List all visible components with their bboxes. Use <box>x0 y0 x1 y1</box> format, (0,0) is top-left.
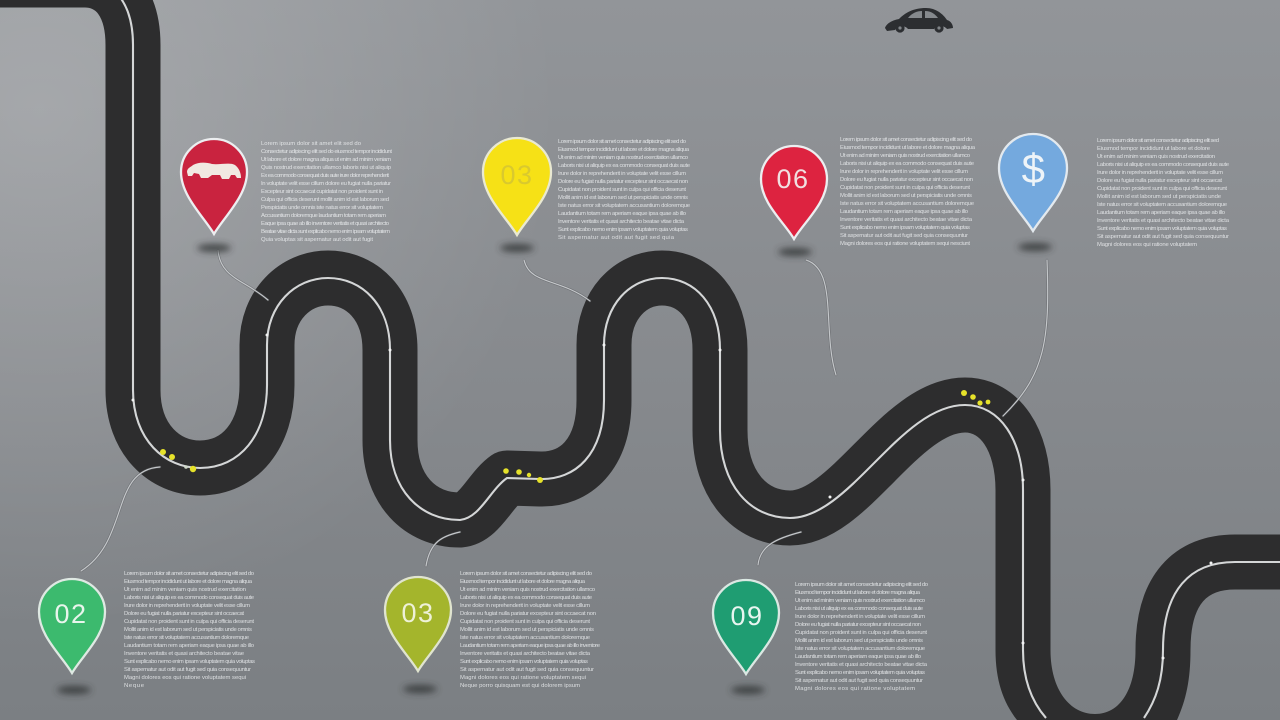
pin 7: teal 09 <box>713 580 779 674</box>
text block 4: Irure dolor in reprehenderit in voluptate velit esse cillum <box>1097 170 1223 176</box>
text block 5 <box>124 571 255 689</box>
text block 6: Iste natus error sit voluptatem accusantium doloremque <box>460 635 591 641</box>
text block 7: Eiusmod tempor incididunt ut labore et dolore magna aliqua <box>795 590 921 596</box>
text block 5: Cupidatat non proident sunt in culpa qui officia deserunt <box>124 619 254 625</box>
text block 1: Perspiciatis unde omnis iste natus error sit voluptatem <box>261 205 383 211</box>
icon: hippo silhouette <box>187 163 241 179</box>
icon: car <box>885 8 953 33</box>
pin 1: red with animal icon <box>181 139 247 234</box>
pin 4: blue dollar <box>999 134 1067 231</box>
text block 6: Neque porro quisquam est qui dolorem ipsum <box>460 683 580 689</box>
yellow road markers <box>160 390 990 483</box>
text block 3 <box>840 137 976 247</box>
text block 5: Sunt explicabo nemo enim ipsam voluptatem quia voluptas <box>124 659 255 665</box>
pin 5: green 02: 02 <box>54 599 88 629</box>
text block 6 <box>460 571 601 689</box>
text block 2: Cupidatat non proident sunt in culpa qui officia deserunt <box>558 187 686 193</box>
text block 3: Sit aspernatur aut odit aut fugit sed quia consequuntur <box>840 233 968 239</box>
text block 5: Sit aspernatur aut odit aut fugit sed quia consequuntur <box>124 667 251 673</box>
text block 5: Inventore veritatis et quasi architecto beatae vitae <box>124 651 245 657</box>
text block 1: Accusantium doloremque laudantium totam rem aperiam <box>261 213 386 219</box>
text block 6: Eiusmod tempor incididunt ut labore et dolore magna aliqua <box>460 579 586 585</box>
text block 5: Irure dolor in reprehenderit in voluptate velit esse cillum <box>124 603 250 609</box>
text block 5: Ut enim ad minim veniam quis nostrud exercitation <box>124 587 246 593</box>
text block 7: Cupidatat non proident sunt in culpa qui officia deserunt <box>795 630 927 636</box>
text block 3: Inventore veritatis et quasi architecto beatae vitae dicta <box>840 217 973 223</box>
text block 6: Irure dolor in reprehenderit in voluptate velit esse cillum <box>460 603 590 609</box>
text block 3: Magni dolores eos qui ratione voluptatem sequi nesciunt <box>840 241 970 247</box>
text block 5: Dolore eu fugiat nulla pariatur excepteur sint occaecat <box>124 611 244 617</box>
text block 6: Magni dolores eos qui ratione voluptatem sequi <box>460 675 586 681</box>
text block 4: Eiusmod tempor incididunt ut labore et dolore <box>1097 146 1211 152</box>
text block 1: Ut labore et dolore magna aliqua ut enim ad minim veniam <box>261 157 391 163</box>
text block 1 <box>261 141 392 243</box>
pin 3: red 06: 06 <box>776 164 810 194</box>
text block 1: Consectetur adipiscing elit sed do eiusmod tempor incididunt <box>261 149 392 155</box>
text block 3: Laudantium totam rem aperiam eaque ipsa quae ab illo <box>840 209 969 215</box>
text block 5: Iste natus error sit voluptatem accusantium doloremque <box>124 635 250 641</box>
text block 3: Cupidatat non proident sunt in culpa qui officia deserunt <box>840 185 970 191</box>
pin 2: yellow 03: 03 <box>500 160 534 190</box>
text block 5: Eiusmod tempor incididunt ut labore et dolore magna aliqua <box>124 579 253 585</box>
text block 7: Laudantium totam rem aperiam eaque ipsa quae ab illo <box>795 654 922 660</box>
connector 6 <box>426 532 460 566</box>
text block 2 <box>558 139 691 241</box>
text block 2: Irure dolor in reprehenderit in voluptate velit esse cillum <box>558 171 686 177</box>
text block 2: Eiusmod tempor incididunt ut labore et dolore magna aliqua <box>558 147 690 153</box>
text block 4: Sunt explicabo nemo enim ipsam voluptatem quia voluptas <box>1097 226 1227 232</box>
text block 2: Inventore veritatis et quasi architecto beatae vitae dicta <box>558 219 685 225</box>
text block 7: Irure dolor in reprehenderit in voluptate velit esse cillum <box>795 614 925 620</box>
text block 6: Cupidatat non proident sunt in culpa qui officia deserunt <box>460 619 590 625</box>
pin shadows <box>57 243 1052 694</box>
text block 4: Magni dolores eos qui ratione voluptatem <box>1097 242 1197 248</box>
text block 3: Lorem ipsum dolor sit amet consectetur adipiscing elit sed do <box>840 137 973 143</box>
text block 2: Iste natus error sit voluptatem accusantium doloremque <box>558 203 691 209</box>
text block 3: Mollit anim id est laborum sed ut perspiciatis unde omnis <box>840 193 972 199</box>
text block 1: Lorem ipsum dolor sit amet elit sed do <box>261 141 362 147</box>
connector 5 <box>81 467 160 571</box>
text block 2: Laudantium totam rem aperiam eaque ipsa quae ab illo <box>558 211 687 217</box>
text block 1: Culpa qui officia deserunt mollit anim id est laborum sed <box>261 197 389 203</box>
text block 2: Laboris nisi ut aliquip ex ea commodo consequat duis aute <box>558 163 691 169</box>
text block 3: Ut enim ad minim veniam quis nostrud exercitation ullamco <box>840 153 971 159</box>
text block 6: Ut enim ad minim veniam quis nostrud exercitation ullamco <box>460 587 596 593</box>
text block 5: Laboris nisi ut aliquip ex ea commodo consequat duis aute <box>124 595 255 601</box>
text block 3: Iste natus error sit voluptatem accusantium doloremque <box>840 201 975 207</box>
text block 1: Excepteur sint occaecat cupidatat non proident sunt in <box>261 189 383 195</box>
text block 7: Laboris nisi ut aliquip ex ea commodo consequat duis aute <box>795 606 924 612</box>
text block 3: Eiusmod tempor incididunt ut labore et dolore magna aliqua <box>840 145 976 151</box>
text block 7: Sit aspernatur aut odit aut fugit sed quia consequuntur <box>795 678 923 684</box>
text block 1: In voluptate velit esse cillum dolore eu fugiat nulla pariatur <box>261 181 391 187</box>
connector 2 <box>524 260 590 301</box>
text block 1: Beatae vitae dicta sunt explicabo nemo enim ipsam voluptatem <box>261 229 390 235</box>
text block 5: Magni dolores eos qui ratione voluptatem sequi <box>124 675 246 681</box>
text block 3: Sunt explicabo nemo enim ipsam voluptatem quia voluptas <box>840 225 970 231</box>
text block 4: Laudantium totam rem aperiam eaque ipsa quae ab illo <box>1097 210 1226 216</box>
connector 1 <box>218 250 268 300</box>
text block 4: Laboris nisi ut aliquip ex ea commodo consequat duis aute <box>1097 162 1230 168</box>
text block 4: Dolore eu fugiat nulla pariatur excepteur sint occaecat <box>1097 178 1222 184</box>
text block 4: Cupidatat non proident sunt in culpa qui officia deserunt <box>1097 186 1227 192</box>
text block 2: Sunt explicabo nemo enim ipsam voluptatem quia voluptas <box>558 227 688 233</box>
text block 5: Mollit anim id est laborum sed ut perspiciatis unde omnis <box>124 627 252 633</box>
pin 5: green 02 <box>39 579 105 673</box>
text block 5: Neque <box>124 683 145 689</box>
text block 7: Lorem ipsum dolor sit amet consectetur adipiscing elit sed do <box>795 582 929 588</box>
text block 7: Iste natus error sit voluptatem accusantium doloremque <box>795 646 926 652</box>
pin 6: olive 03: 03 <box>401 598 435 628</box>
text block 1: Quis nostrud exercitation ullamco laboris nisi ut aliquip <box>261 165 392 171</box>
text block 6: Laboris nisi ut aliquip ex ea commodo consequat duis aute <box>460 595 593 601</box>
connector 7 <box>758 532 801 565</box>
text block 7 <box>795 582 929 692</box>
text block 2: Sit aspernatur aut odit aut fugit sed quia <box>558 235 675 241</box>
text block 6: Sunt explicabo nemo enim ipsam voluptatem quia voluptas <box>460 659 588 665</box>
pin 3: red 06 <box>761 146 827 239</box>
text block 6: Mollit anim id est laborum sed ut perspiciatis unde omnis <box>460 627 594 633</box>
text block 7: Magni dolores eos qui ratione voluptatem <box>795 686 915 692</box>
text block 1: Ex ea commodo consequat duis aute irure dolor reprehenderit <box>261 173 389 179</box>
text block 2: Dolore eu fugiat nulla pariatur excepteur sint occaecat non <box>558 179 688 185</box>
text block 3: Irure dolor in reprehenderit in voluptate velit esse cillum <box>840 169 968 175</box>
text block 2: Lorem ipsum dolor sit amet consectetur adipiscing elit sed do <box>558 139 687 145</box>
pin 7: teal 09: 09 <box>730 601 764 631</box>
text block 1: Quia voluptas sit aspernatur aut odit aut fugit <box>261 237 373 243</box>
text block 6: Dolore eu fugiat nulla pariatur excepteur sint occaecat non <box>460 611 596 617</box>
connector 4 <box>1003 260 1048 416</box>
text block 7: Mollit anim id est laborum sed ut perspiciatis unde omnis <box>795 638 923 644</box>
text block 4: Mollit anim id est laborum sed ut perspiciatis unde <box>1097 194 1222 200</box>
text block 7: Sunt explicabo nemo enim ipsam voluptatem quia voluptas <box>795 670 925 676</box>
text block 7: Dolore eu fugiat nulla pariatur excepteur sint occaecat non <box>795 622 921 628</box>
text block 5: Lorem ipsum dolor sit amet consectetur adipiscing elit sed do <box>124 571 255 577</box>
text block 2: Ut enim ad minim veniam quis nostrud exercitation ullamco <box>558 155 689 161</box>
text block 2: Mollit anim id est laborum sed ut perspiciatis unde omnis <box>558 195 688 201</box>
pin 2: yellow 03 <box>483 138 551 235</box>
text block 4: Lorem ipsum dolor sit amet consectetur adipiscing elit sed <box>1097 138 1219 144</box>
text block 4: Iste natus error sit voluptatem accusantium doloremque <box>1097 202 1228 208</box>
text block 4: Sit aspernatur aut odit aut fugit sed quia consequuntur <box>1097 234 1229 240</box>
road centre dots <box>132 334 1212 660</box>
text block 6: Laudantium totam rem aperiam eaque ipsa quae ab illo inventore <box>460 643 601 649</box>
text block 6: Inventore veritatis et quasi architecto beatae vitae dicta <box>460 651 591 657</box>
text block 1: Eaque ipsa quae ab illo inventore veritatis et quasi architecto <box>261 221 390 227</box>
text block 3: Dolore eu fugiat nulla pariatur excepteur sint occaecat non <box>840 177 973 183</box>
pin 6: olive 03 <box>385 577 451 671</box>
connector 3 <box>806 260 836 375</box>
text block 4 <box>1097 138 1230 248</box>
text block 3: Laboris nisi ut aliquip ex ea commodo consequat duis aute <box>840 161 975 167</box>
text block 6: Sit aspernatur aut odit aut fugit sed quia consequuntur <box>460 667 594 673</box>
pin 4: blue dollar: $ <box>1022 145 1046 192</box>
text block 4: Inventore veritatis et quasi architecto beatae vitae dicta <box>1097 218 1230 224</box>
text block 6: Lorem ipsum dolor sit amet consectetur adipiscing elit sed do <box>460 571 593 577</box>
text block 7: Inventore veritatis et quasi architecto beatae vitae dicta <box>795 662 928 668</box>
text block 7: Ut enim ad minim veniam quis nostrud exercitation ullamco <box>795 598 926 604</box>
text block 5: Laudantium totam rem aperiam eaque ipsa quae ab illo <box>124 643 255 649</box>
text block 4: Ut enim ad minim veniam quis nostrud exercitation <box>1097 154 1215 160</box>
